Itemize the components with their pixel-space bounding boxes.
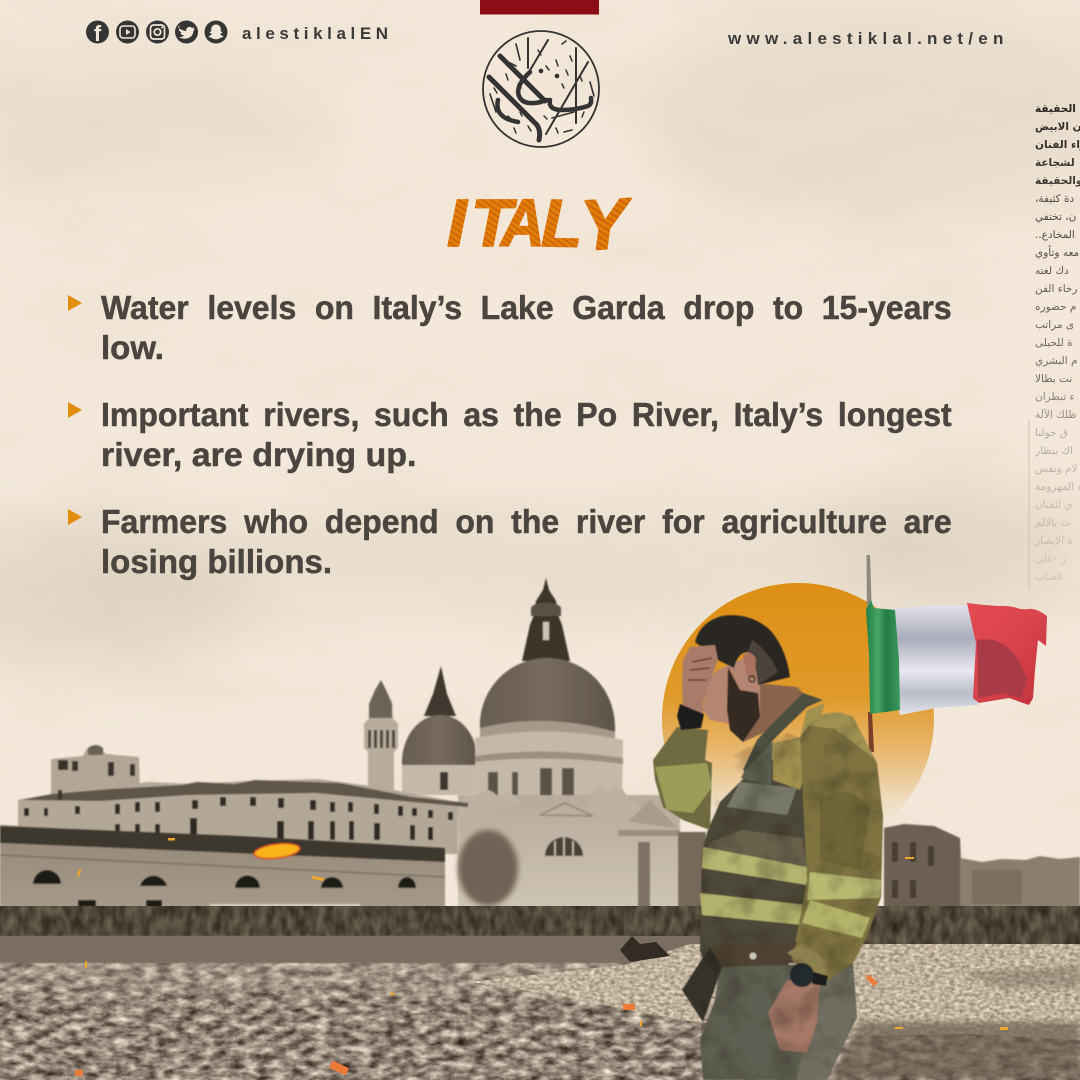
bullet text: Lake Garda [100,289,952,366]
red band [967,603,1047,705]
bullet text: Po River: river, are drying up. [101,436,416,473]
chest stripes [702,847,807,885]
title: ITALY: I [447,186,469,261]
white band [884,605,981,715]
newspaper column: دة كثيفة، [1035,193,1075,205]
title: ITALY: L [541,186,583,262]
newspaper column: ظلك الآلة [1035,408,1077,421]
neck [743,683,803,742]
tower [364,680,398,796]
newspaper column: رخاء الفن [1035,283,1077,295]
title: ITALY: T [471,186,517,261]
icon: youtube [116,20,139,44]
newspaper column: لام ونفس [1035,463,1078,475]
newspaper column: م البشري [1035,355,1078,367]
yellow chest panel [773,703,825,790]
scene: Venice skyline [0,578,1080,1080]
bullet text: farmers: Farmers who depend on the river for agriculture are [101,503,952,540]
sleeve [792,713,883,985]
light gravel shore [470,944,1080,1044]
newspaper column: ن، تختفي [1035,211,1076,223]
bullet markers [68,295,82,525]
newspaper column: العتاب [1035,571,1062,583]
belt and pouch [712,942,797,967]
pocket flap [727,782,797,815]
dry water channel [0,936,700,966]
icon: instagram [146,20,169,44]
grime overlay [700,713,883,1080]
newspaper column: م حضوره [1035,301,1076,313]
icon: facebook [86,20,109,46]
newspaper column: دك لغته [1035,265,1069,277]
title: ITALY: A [499,185,545,261]
bullet text: Lake Garda: Water levels on Italy’s Lake Garda drop to 15-years [101,289,952,326]
icon: snapchat [204,20,228,44]
low arcaded warehouse [0,825,445,914]
social icons [86,20,228,46]
flying embers [75,838,1008,1076]
cuff and watch [787,943,828,980]
newspaper column: ت بالالم [1035,517,1071,529]
orange sun disc [662,583,934,855]
newspaper column: اك بنظار [1034,445,1073,457]
icon: twitter [175,20,198,44]
newspaper column: ة للحبلى [1035,337,1073,349]
long convent building [18,745,468,854]
bullet text: farmers: losing billions. [101,543,332,580]
newspaper column: ء تبطران [1035,391,1074,403]
social handle: alestiklalEN [242,24,393,43]
newspaper column: نت بطالا [1035,373,1072,385]
bullet text: farmers [101,503,952,580]
newspaper column: ة الإبصار [1034,535,1073,547]
driftwood [620,936,670,962]
raised sleeve [653,727,712,830]
great dome and lantern [475,578,623,806]
newspaper column: ر -على [1035,553,1066,565]
logo emblem [483,31,599,147]
icon: facebook: f [94,21,102,46]
lower hand [768,980,820,1053]
torso [700,742,825,968]
title: ITALY: Y [579,183,635,265]
second dome [402,666,478,795]
rubble riverbed [0,962,1080,1080]
face [703,650,760,742]
newspaper column: ي للفنان [1035,499,1073,511]
tree by church [458,830,518,906]
flag pole [866,555,874,752]
newspaper column: ى مراتب [1035,319,1074,331]
raised hand [682,645,718,717]
firefighter [653,615,883,1080]
newspaper column: ق حولنا [1035,427,1068,439]
hair [695,615,790,685]
foliage band [0,906,1080,948]
newspaper column: المخادع.. [1035,229,1075,241]
green band [866,600,900,714]
right-hand buildings [884,824,1080,910]
flag [866,555,1047,752]
wristbands [677,704,704,730]
bullet text: Po River [101,396,952,474]
sleeve stripes [807,872,881,900]
church facade [455,786,706,910]
title: ITALY [447,183,635,265]
ear [743,653,756,679]
newspaper column: معه وتأوي [1035,245,1079,259]
website url: www.alestiklal.net/en [727,29,1009,48]
bullet text: Lake Garda: low. [101,329,164,366]
trousers [700,963,857,1080]
newspaper column: لشجاعة [1035,157,1075,169]
collar [743,692,823,777]
top red bar [480,0,599,14]
bullet text: Po River: Important rivers, such as the Po River, Italy’s longest [101,396,952,433]
beard [727,667,760,742]
newspaper column [1034,103,1080,583]
